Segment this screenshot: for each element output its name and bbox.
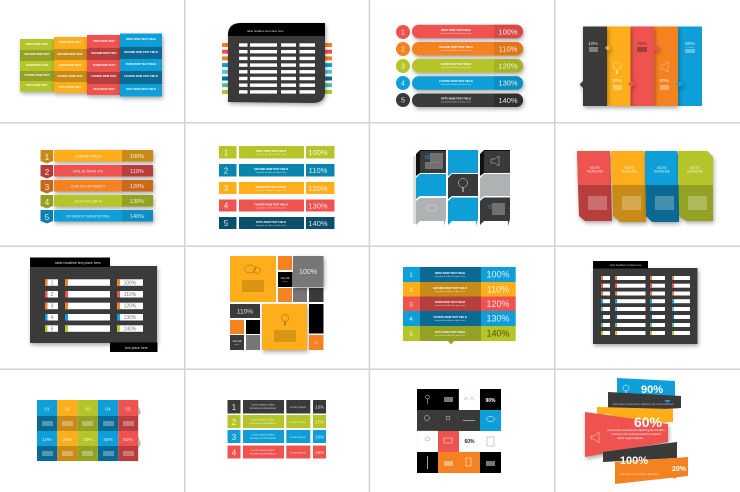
column: orange bbox=[54, 37, 87, 93]
row 2 cubes bbox=[416, 174, 510, 199]
tile group: lower left squares: VALUE bbox=[233, 339, 242, 343]
column: orange: FOURTH ROW TEXT bbox=[57, 74, 83, 78]
stack row 1 bbox=[403, 267, 516, 286]
row labels: 4 bbox=[51, 315, 54, 321]
flat row 5 bbox=[219, 217, 334, 229]
flat row 4 bbox=[219, 200, 334, 212]
ribbon 3: CUM EA OFFENDIT bbox=[71, 184, 106, 188]
column: orange: FIFTH ROW TEXT bbox=[59, 85, 81, 89]
block column 2: 20% bbox=[63, 437, 73, 443]
column: olive: FIRST ROW TEXT bbox=[26, 42, 48, 46]
lorem row 3 bbox=[228, 430, 326, 443]
flat row 5: 5 bbox=[224, 219, 229, 228]
tile group: lower left squares bbox=[230, 320, 260, 350]
lorem row 2: sit amet consectetuer bbox=[250, 421, 276, 425]
stack row 5: 5 bbox=[409, 331, 413, 338]
flat row 3: 120% bbox=[308, 184, 328, 193]
flat row 2: 2 bbox=[224, 166, 229, 176]
ribbon 3: 3 bbox=[45, 183, 50, 192]
ribbon 4 bbox=[40, 195, 153, 208]
headline tab: table headline text place here bbox=[55, 261, 101, 265]
row labels: 5 bbox=[51, 326, 54, 332]
stack row 2: 110% bbox=[487, 284, 509, 294]
block column 3 bbox=[78, 400, 98, 461]
banner: dark 100% bbox=[603, 442, 677, 462]
lorem row 3: Lorem ipsum bbox=[290, 435, 307, 439]
panel: numbered pills bbox=[396, 25, 523, 107]
block column 3: 03 bbox=[85, 406, 91, 412]
block column 4 bbox=[98, 400, 118, 461]
panel: dense dark table bbox=[593, 261, 698, 344]
stack row 1: long table headline text place here bbox=[435, 275, 466, 278]
pill row 5: 140% bbox=[498, 96, 518, 105]
flat row 4: long table headline text place here bbox=[256, 206, 287, 210]
flat row 1: 100% bbox=[308, 148, 328, 157]
lorem row 3: Lorem ipsum dolor bbox=[251, 432, 275, 436]
pill row 5: 5 bbox=[401, 98, 405, 104]
banner: red with speaker: lorem ipsum consectetuer adipiscing elit sed diam bbox=[607, 428, 665, 432]
table rows bbox=[601, 276, 690, 335]
banner: red with speaker: nonummy nibh euismod tincidunt ut laoreet bbox=[611, 432, 661, 436]
banner: blue 90%: 90% bbox=[641, 384, 663, 396]
ribbon 4: 4 bbox=[45, 198, 50, 207]
stack row 4: 4 bbox=[409, 316, 413, 323]
side tabs bbox=[222, 43, 332, 94]
tile group: top small squares: VALUE bbox=[281, 276, 290, 280]
table header: table headline text place here bbox=[247, 29, 284, 33]
pill row 2 bbox=[396, 42, 523, 56]
panel: four folded note columns bbox=[577, 151, 713, 222]
pill row 1: 1 bbox=[401, 30, 405, 36]
panel: dark table with coloured side tabs bbox=[222, 23, 332, 103]
ribbon 3 bbox=[40, 180, 153, 194]
block column 5: 05 bbox=[125, 406, 131, 412]
banner: orange 20%: 20% bbox=[672, 466, 687, 473]
flat row 5: 140% bbox=[308, 219, 328, 228]
dark card bbox=[30, 266, 157, 343]
pill row 4: 4 bbox=[401, 80, 405, 88]
panel: folded cube grid bbox=[413, 150, 510, 226]
column: olive: FOURTH ROW TEXT bbox=[24, 73, 50, 77]
lorem row 1: Lorem ipsum dolor bbox=[251, 402, 275, 406]
headline tab: short headline text place here bbox=[610, 264, 642, 267]
pill row 5: long table headline text place here bbox=[441, 100, 472, 104]
column: orange: SECOND ROW TEXT bbox=[57, 52, 83, 56]
flat row 3: THIRD ROW TEXT FIELD bbox=[256, 185, 286, 189]
lorem row 1: 13% bbox=[315, 404, 324, 410]
column: blue bbox=[120, 34, 162, 96]
lorem row 1: Lorem ipsum bbox=[290, 405, 307, 409]
stack row 2: long table headline text place here bbox=[435, 290, 466, 293]
stack row 4: long table headline text place here bbox=[435, 319, 466, 322]
panel: four-row lorem table bbox=[228, 400, 326, 458]
tile group: right column: % bbox=[314, 341, 318, 345]
ribbon 1: 1 bbox=[45, 153, 50, 162]
row 3 cubes: 70 bbox=[487, 205, 493, 211]
block column 1: 01 bbox=[44, 406, 50, 412]
column: olive: FIFTH ROW TEXT bbox=[26, 83, 48, 87]
ribbon 2: 2 bbox=[45, 168, 50, 177]
stack row 2: 2 bbox=[409, 287, 413, 294]
banner: red with speaker: dolore magna aliquam bbox=[617, 436, 643, 440]
stack row 3: 120% bbox=[486, 299, 510, 309]
lorem row 4: 16% bbox=[315, 450, 324, 455]
flat row 1: FIRST ROW TEXT FIELD bbox=[256, 149, 286, 153]
label: 60%: 60% bbox=[634, 414, 663, 430]
ribbon 3: 120% bbox=[130, 184, 144, 190]
ribbon 5: 5 bbox=[45, 213, 50, 222]
pill row 2: SECOND ROW TEXT FIELD bbox=[439, 45, 473, 49]
lorem row 2: Lorem ipsum dolor bbox=[251, 418, 275, 422]
stack row 5: 140% bbox=[486, 328, 510, 338]
flat row 3: 3 bbox=[224, 184, 229, 193]
banner: yellow 60% bbox=[597, 407, 673, 430]
lorem row 4: Lorem ipsum dolor bbox=[251, 448, 275, 452]
ribbon 5 bbox=[40, 210, 153, 224]
tile row 2 bbox=[417, 410, 501, 431]
lorem row 2: Lorem ipsum bbox=[290, 420, 307, 424]
panel: ribbon list bbox=[40, 150, 153, 224]
tile group: lower left squares: TEXT bbox=[234, 344, 240, 346]
pill row 3 bbox=[396, 59, 523, 73]
column: red: FOURTH ROW TEXT bbox=[91, 74, 117, 78]
block column 1: 10% bbox=[42, 437, 53, 443]
block column 4: 40% bbox=[103, 437, 114, 443]
flat row 2: 110% bbox=[309, 166, 328, 175]
column: olive: THIRD ROW TEXT bbox=[26, 63, 49, 67]
flat row 4: 4 bbox=[224, 202, 229, 210]
white table fields bbox=[239, 43, 315, 94]
ribbon 2: 110% bbox=[130, 169, 144, 175]
block column 4: 04 bbox=[105, 406, 111, 412]
stack row 4: FOURTH ROW TEXT FIELD bbox=[433, 315, 467, 319]
ribbon 2: ZRIL ALTERA VIX bbox=[73, 170, 104, 174]
column: red: FIFTH ROW TEXT bbox=[93, 87, 115, 91]
flat row 4: 130% bbox=[308, 202, 328, 210]
column: red bbox=[87, 35, 120, 95]
lorem row 2: 17% bbox=[315, 420, 324, 424]
strip: blue 50%: LOREM bbox=[686, 47, 694, 49]
column: blue: THIRD ROW TEXT FIELD bbox=[126, 62, 156, 66]
pill row 4: FOURTH ROW TEXT FIELD bbox=[439, 79, 473, 83]
flat row 1: 1 bbox=[224, 148, 229, 158]
tile: dark 110%: 110% bbox=[237, 308, 253, 316]
lorem row 2: 2 bbox=[232, 418, 237, 427]
strip: blue 50%: 50% bbox=[685, 41, 696, 47]
lorem row 3: 3 bbox=[232, 433, 237, 442]
pill row 2: long table headline text place here bbox=[441, 49, 472, 52]
tile: large orange with light bulb bbox=[262, 304, 307, 350]
stack row 2 bbox=[403, 282, 516, 300]
lorem row 2 bbox=[228, 415, 326, 428]
strip: yellow 20%: 20% bbox=[612, 78, 623, 84]
stack row 4: 130% bbox=[486, 314, 510, 324]
fold shadows bbox=[138, 405, 141, 448]
pill row 4: 130% bbox=[498, 78, 518, 88]
note column yellow bbox=[611, 151, 647, 222]
flat row 1: long table headline text place here bbox=[256, 153, 287, 156]
row labels: 2 bbox=[51, 292, 54, 298]
note column olive: HEADLINE bbox=[687, 170, 703, 174]
flat row 5: FIFTH ROW TEXT FIELD bbox=[256, 220, 286, 224]
lorem row 4: 4 bbox=[232, 448, 237, 458]
row labels: 110% bbox=[124, 292, 137, 298]
note column red bbox=[577, 151, 612, 221]
row labels: 140% bbox=[124, 326, 137, 332]
pill row 5: FIFTH ROW TEXT FIELD bbox=[441, 96, 471, 100]
lorem row 1 bbox=[228, 400, 326, 414]
footer tab: text place here bbox=[125, 346, 148, 350]
row labels: 130% bbox=[124, 315, 137, 321]
column: red: THIRD ROW TEXT bbox=[93, 63, 116, 67]
pill row 2: 2 bbox=[401, 46, 405, 54]
column: blue: SECOND ROW TEXT FIELD bbox=[124, 50, 158, 54]
note column red: HEADLINE bbox=[587, 170, 603, 174]
row 1 cubes: 80 bbox=[425, 155, 431, 161]
stack row 5: long table headline text place here bbox=[435, 334, 466, 337]
flat row 4: FOURTH ROW TEXT FIELD bbox=[254, 202, 288, 206]
pill row 5 bbox=[396, 93, 523, 107]
panel: stacked colour table bbox=[403, 267, 516, 344]
flat row 3: long table headline text place here bbox=[256, 189, 287, 192]
tile group: top small squares: TEXT bbox=[282, 281, 288, 283]
row labels: 100% bbox=[124, 280, 137, 286]
column: orange: FIRST ROW TEXT bbox=[59, 40, 81, 44]
note column red: NOTE bbox=[590, 166, 601, 170]
panel: vertical percent strips bbox=[580, 26, 702, 106]
flat row 2 bbox=[219, 164, 334, 176]
cube shadows bbox=[413, 156, 416, 224]
tile row 1: 90% bbox=[485, 398, 496, 404]
table rows bbox=[45, 279, 143, 332]
pill row 3: long table headline text place here bbox=[441, 66, 472, 69]
row labels bbox=[51, 280, 137, 332]
flat row 2: SECOND ROW TEXT FIELD bbox=[254, 167, 288, 171]
panel: stepped four-column table bbox=[20, 34, 162, 96]
note column yellow: NOTE bbox=[624, 166, 635, 170]
note column blue: NOTE bbox=[657, 166, 668, 170]
strip: red 30%: 30% bbox=[637, 41, 648, 47]
panel: five-column fold blocks bbox=[37, 400, 141, 461]
stack row 3: THIRD ROW TEXT FIELD bbox=[435, 300, 465, 304]
banner: red with speaker bbox=[585, 412, 668, 457]
lorem row 3: sit amet consectetuer bbox=[250, 436, 276, 440]
strip: orange 40%: 40% bbox=[659, 78, 670, 84]
column: blue: FIFTH ROW TEXT FIELD bbox=[126, 87, 156, 91]
column: red: FIRST ROW TEXT bbox=[93, 39, 115, 43]
pill row 1: long table headline text place here bbox=[441, 32, 472, 35]
flat row 5: long table headline text place here bbox=[256, 224, 287, 227]
lorem row 4 bbox=[228, 446, 326, 458]
column: blue: FIRST ROW TEXT FIELD bbox=[126, 37, 156, 41]
block column 5 bbox=[118, 400, 138, 461]
banner: dark strip: lorem ipsum consectetuer adipiscing elit, sed do eiusmod bbox=[613, 403, 674, 406]
label: 100%: 100% bbox=[620, 455, 648, 467]
ribbon 5: 140% bbox=[130, 214, 144, 220]
tile: large orange with speech bubbles bbox=[230, 256, 276, 302]
panel: mosaic tiles bbox=[230, 256, 324, 350]
stack row 3: long table headline text place here bbox=[435, 304, 466, 307]
lorem row 4: Lorem ipsum bbox=[290, 450, 307, 454]
banner: orange 20%: lorem ipsum consectetuer adipiscing bbox=[620, 473, 659, 476]
tile row 3: 60% bbox=[464, 439, 475, 445]
column: blue: FOURTH ROW TEXT FIELD bbox=[124, 74, 158, 78]
stack row 1: 1 bbox=[409, 272, 413, 279]
note column blue: HEADLINE bbox=[654, 170, 670, 174]
panel: icon tile matrix bbox=[417, 389, 501, 473]
column: olive: SECOND ROW TEXT bbox=[24, 52, 50, 56]
flat row 3 bbox=[219, 182, 334, 194]
pill row 1: FIRST ROW TEXT FIELD bbox=[441, 28, 471, 32]
block column 2 bbox=[57, 400, 78, 461]
dark card bbox=[593, 268, 698, 344]
tile row 4 bbox=[417, 452, 501, 473]
stack row 3 bbox=[403, 296, 516, 314]
lorem row 1: 1 bbox=[232, 403, 237, 412]
pill row 3: 120% bbox=[498, 62, 518, 70]
row labels: 1 bbox=[51, 280, 54, 286]
panel: dark table three columns bbox=[30, 258, 158, 352]
block column 3: 30% bbox=[83, 437, 94, 443]
column: red: SECOND ROW TEXT bbox=[91, 51, 117, 55]
pill row 4: long table headline text place here bbox=[441, 83, 472, 86]
dark card bbox=[228, 23, 325, 103]
row labels: 3 bbox=[51, 304, 54, 310]
column: orange: THIRD ROW TEXT bbox=[59, 63, 82, 67]
note column blue bbox=[645, 151, 679, 222]
strip: blue 50% bbox=[678, 26, 702, 106]
ribbon 4: DUO DOLOR M bbox=[74, 200, 102, 204]
flat row 1 bbox=[219, 146, 334, 158]
panel: angled banners with percentages bbox=[585, 378, 688, 484]
lorem row 1: sit amet consectetuer bbox=[250, 406, 276, 410]
stack row 5 bbox=[403, 326, 516, 344]
panel: flat three-column rows bbox=[219, 146, 334, 229]
pill row 4 bbox=[396, 76, 523, 90]
stack row 4 bbox=[403, 311, 516, 330]
ribbon 2 bbox=[40, 165, 153, 178]
block column 5: 50% bbox=[123, 437, 134, 443]
flat row 2: long table headline text place here bbox=[256, 171, 287, 174]
stack row 1: 100% bbox=[486, 270, 510, 280]
row colour markers bbox=[601, 276, 674, 335]
tile group: top small squares bbox=[278, 256, 324, 302]
lorem row 4: sit amet consectetuer bbox=[250, 452, 276, 456]
lorem row 3: 19% bbox=[315, 434, 324, 440]
row labels: 120% bbox=[124, 304, 137, 310]
strip: dark 10%: 10% bbox=[588, 41, 599, 47]
stack row 5: FIFTH ROW TEXT FIELD bbox=[435, 330, 465, 334]
pill row 2: 110% bbox=[499, 44, 518, 54]
tile: gray 100%: 100% bbox=[299, 269, 317, 276]
block column 1 bbox=[37, 400, 57, 461]
stack row 1: FIRST ROW TEXT FIELD bbox=[435, 271, 465, 275]
note column olive: NOTE bbox=[690, 166, 701, 170]
ribbon 1 bbox=[40, 150, 153, 164]
ribbon 5: OFFENDIT SADIPSCING bbox=[66, 214, 110, 218]
ribbon 4: 130% bbox=[130, 199, 144, 205]
banner: orange 20% bbox=[615, 457, 688, 484]
ribbon 1: LOREM IPSUM bbox=[75, 154, 101, 158]
pill row 1: 100% bbox=[498, 28, 518, 36]
stack row 2: SECOND ROW TEXT FIELD bbox=[433, 286, 467, 290]
pill row 1 bbox=[396, 25, 523, 39]
note column olive bbox=[678, 151, 713, 221]
block column 2: 02 bbox=[65, 406, 70, 412]
pill row 3: THIRD ROW TEXT FIELD bbox=[441, 62, 471, 66]
column: olive bbox=[20, 39, 54, 92]
ribbon 1: 100% bbox=[130, 154, 144, 160]
stack row 3: 3 bbox=[409, 302, 413, 308]
note column yellow: HEADLINE bbox=[621, 170, 637, 174]
pill row 3: 3 bbox=[401, 64, 405, 70]
